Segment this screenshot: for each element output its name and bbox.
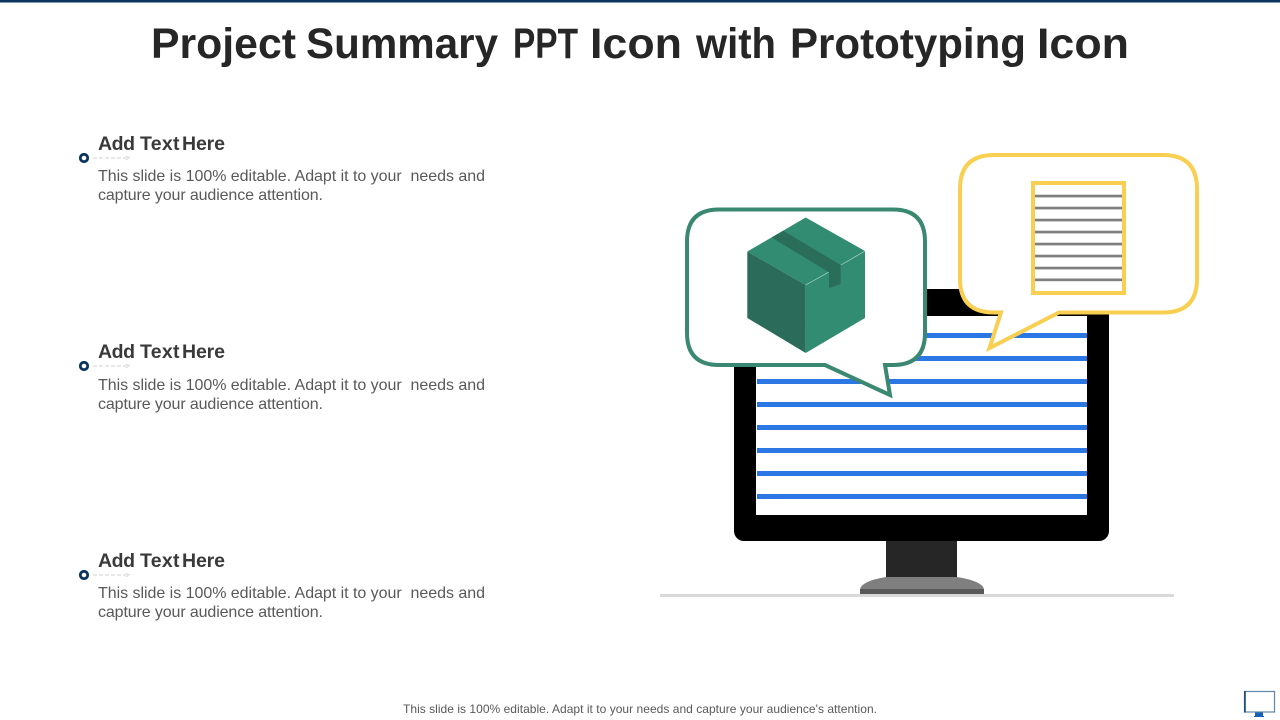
heading 1: Add: [98, 133, 135, 155]
body 2: [98, 377, 485, 413]
title: [151, 20, 1129, 68]
heading 2: Here: [182, 341, 225, 363]
screen lines: [757, 333, 1087, 499]
illustration: monitor with speech bubbles: [660, 155, 1197, 597]
title: with: [695, 20, 776, 68]
bullet 3: [80, 571, 130, 579]
yellow speech bubble: [960, 155, 1197, 348]
body 2: This slide is 100% editable. Adapt it to your needs and: [98, 377, 485, 394]
icon: corner monitor: [1244, 691, 1274, 717]
title: Icon: [590, 20, 682, 68]
body 1: This slide is 100% editable. Adapt it to your needs and: [98, 168, 485, 185]
heading 1: [98, 133, 225, 155]
bullet 1: [80, 154, 130, 162]
text block 2: [80, 341, 485, 413]
footer note: This slide is 100% editable. Adapt it to your needs and capture your audience's attention.: [403, 702, 877, 716]
title: Summary: [306, 20, 498, 68]
body 1: [98, 168, 485, 204]
body 3: [98, 585, 485, 621]
heading 3: Add: [98, 550, 135, 572]
floor line: [660, 594, 1174, 597]
heading 2: [98, 341, 225, 363]
heading 2: Add: [98, 341, 135, 363]
title: PPT: [513, 20, 578, 68]
heading 3: [98, 550, 225, 572]
monitor screen frame: [734, 289, 1109, 541]
heading 3: Here: [182, 550, 225, 572]
body 3: capture your audience attention.: [98, 604, 323, 621]
title: Icon: [1037, 20, 1129, 68]
icon: document: [1033, 183, 1124, 293]
body 3: This slide is 100% editable. Adapt it to your needs and: [98, 585, 485, 602]
green speech bubble: [687, 210, 925, 395]
body 2: capture your audience attention.: [98, 396, 323, 413]
icon: package box: [747, 218, 865, 353]
text block 1: [80, 133, 485, 204]
heading 1: Text: [140, 133, 180, 155]
monitor stand: [860, 541, 984, 594]
title: Prototyping: [790, 20, 1026, 68]
heading 2: Text: [140, 341, 180, 363]
heading 3: Text: [140, 550, 180, 572]
heading 1: Here: [182, 133, 225, 155]
title: Project: [151, 20, 296, 68]
text block 3: [80, 550, 485, 621]
bullet 2: [80, 362, 130, 370]
body 1: capture your audience attention.: [98, 187, 323, 204]
